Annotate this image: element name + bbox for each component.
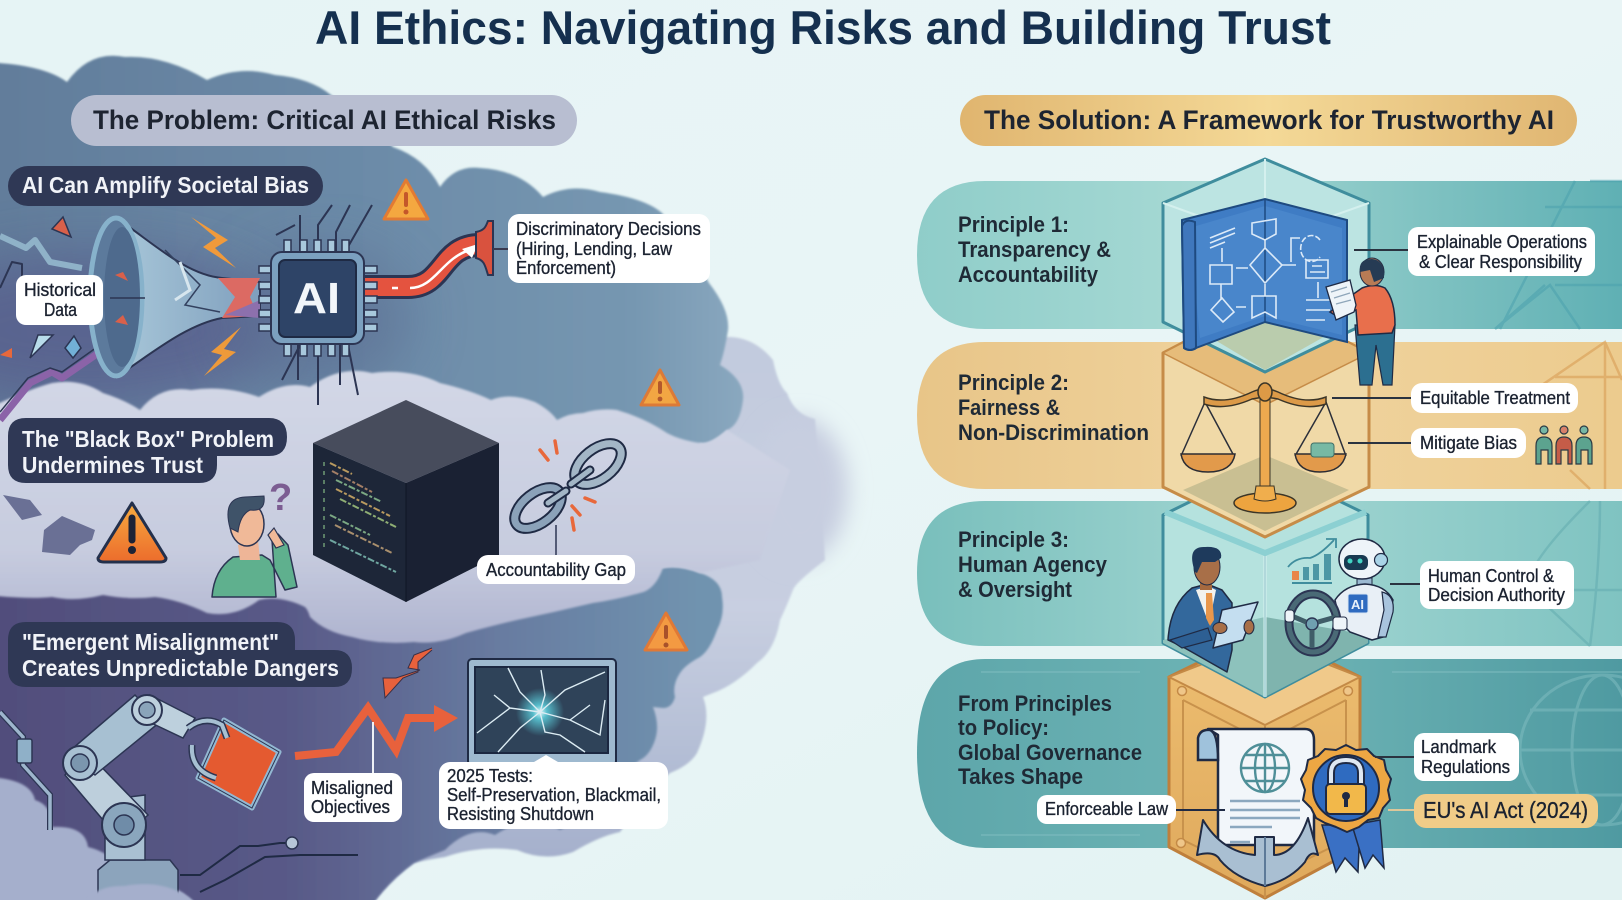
callout: EU AI act xyxy=(1388,794,1598,828)
band 2 xyxy=(917,342,1622,489)
upper blue cloud xyxy=(0,56,743,600)
text: principle 3: Principle 3: xyxy=(958,527,1069,552)
callout: equitable treatment: Equitable Treatment xyxy=(1420,388,1570,408)
icon: torn fragments and warning xyxy=(3,495,166,562)
heading: the problem xyxy=(71,95,577,146)
icon: robot arm gripping chip xyxy=(0,695,358,900)
base xyxy=(98,860,178,900)
callout: human control: Decision Authority xyxy=(1428,585,1565,605)
code lines xyxy=(330,463,396,572)
subheading: emergent misalignment: Creates Unpredictable Dangers xyxy=(22,655,339,681)
gripper xyxy=(188,721,227,778)
icon: black box cube xyxy=(313,400,499,602)
outer lavender cloud mass xyxy=(0,337,825,900)
callout: landmark regulations xyxy=(1375,733,1519,781)
band background motifs xyxy=(1495,181,1622,329)
callout: 2025 tests xyxy=(439,755,668,829)
callout: discriminatory decisions: Enforcement) xyxy=(516,258,616,278)
lines and callouts for principle 2 xyxy=(1332,383,1578,458)
subheading: black box xyxy=(8,418,287,483)
text: principle 1: Principle 1: xyxy=(958,212,1069,237)
text: from principles to policy: to Policy: xyxy=(958,715,1049,740)
subheading: black box: Undermines Trust xyxy=(22,452,203,478)
callout: misaligned objectives: Objectives xyxy=(311,797,390,817)
middle lavender cloud xyxy=(0,371,790,643)
circuit traces xyxy=(180,843,358,892)
icon: confused man: ? xyxy=(269,477,292,519)
panel: principle bands xyxy=(917,181,1622,848)
icon: person reading document xyxy=(1326,258,1395,385)
bottom left lavender cloud xyxy=(0,777,197,900)
title: AI Ethics: Navigating Risks and Building Trust xyxy=(315,1,1331,54)
icon: warning triangle 1 xyxy=(384,180,428,219)
icon: three people xyxy=(1536,426,1592,464)
callout: explainable operations xyxy=(1354,227,1595,276)
cloud wisp over robot base xyxy=(85,884,197,900)
icon: seal badge with lock xyxy=(1301,745,1391,872)
lower purple-blue cloud xyxy=(0,560,723,900)
band 3 xyxy=(917,501,1622,646)
icon: scales of justice xyxy=(1181,383,1346,513)
callout: mitigate bias xyxy=(1411,428,1526,458)
callout: human control: Human Control & xyxy=(1428,566,1554,586)
subheading: black box: The "Black Box" Problem xyxy=(22,426,274,452)
cracks and debris xyxy=(0,236,110,420)
callout: misaligned objectives xyxy=(304,773,402,822)
lower arm xyxy=(65,750,148,840)
icon: anchor xyxy=(1197,818,1318,886)
band 4 xyxy=(917,659,1622,848)
callout: explainable operations: Explainable Operations xyxy=(1417,232,1587,252)
soft right edge of lavender mass xyxy=(752,418,848,562)
callout: enforceable law xyxy=(1037,795,1225,824)
text: principle 1: Accountability xyxy=(958,262,1099,287)
callout: human control xyxy=(1390,561,1574,609)
callout: historical data: Data xyxy=(44,300,78,320)
callout: historical data xyxy=(16,275,103,325)
callout: accountability gap: Accountability Gap xyxy=(486,560,626,580)
red output pipe xyxy=(360,221,508,288)
icon: AI chip xyxy=(259,205,377,405)
text: from principles to policy: Takes Shape xyxy=(958,764,1083,789)
heading: the solution xyxy=(960,95,1577,146)
icon: steering wheel xyxy=(1285,594,1347,652)
callout: accountability gap xyxy=(477,555,635,584)
text: principle 3: & Oversight xyxy=(958,577,1073,602)
icon: cracked monitor xyxy=(468,659,616,765)
panel: problem storm clouds xyxy=(0,56,848,900)
block 1: glass transparency box xyxy=(1163,159,1369,372)
dark purple shade upper left xyxy=(0,255,280,405)
icon: businessman with tablet xyxy=(1168,547,1258,672)
upper arm xyxy=(65,695,160,775)
block 2: wooden fairness box xyxy=(1163,300,1369,537)
callout: discriminatory decisions: (Hiring, Lending, Law xyxy=(516,239,673,259)
icon: law scroll xyxy=(1198,729,1314,845)
callout: historical data: Historical xyxy=(24,280,96,300)
text: from principles to policy: From Principles xyxy=(958,691,1112,716)
callout: landmark regulations: Landmark xyxy=(1421,737,1497,757)
subheading: bias xyxy=(8,166,323,206)
text: from principles to policy: Global Governance xyxy=(958,740,1142,765)
callout: landmark regulations: Regulations xyxy=(1421,757,1510,777)
block 4: wooden policy crate xyxy=(1169,630,1360,898)
illustration: data funnel xyxy=(0,217,260,420)
text: from principles to policy xyxy=(958,691,1142,789)
funnel xyxy=(116,218,260,377)
text: principle 3 xyxy=(958,527,1108,602)
pipes xyxy=(0,712,50,830)
callout: discriminatory decisions xyxy=(508,214,710,283)
callout: enforceable law: Enforceable Law xyxy=(1045,799,1169,819)
callout: explainable operations: & Clear Responsibility xyxy=(1419,252,1582,272)
icon: small bar chart xyxy=(1288,539,1336,583)
callout: 2025 tests: 2025 Tests: xyxy=(447,766,533,786)
text: principle 2: Fairness & xyxy=(958,395,1060,420)
joints xyxy=(102,803,146,847)
icon: warning triangle 2 xyxy=(641,370,679,405)
icon: lightning bolts xyxy=(191,217,241,376)
callout: mitigate bias: Mitigate Bias xyxy=(1420,433,1517,453)
icon: blue blueprint xyxy=(1182,199,1347,350)
text: principle 2: Principle 2: xyxy=(958,370,1069,395)
icon: confused man xyxy=(212,477,297,597)
heading: the problem: The Problem: Critical AI Ethical Risks xyxy=(93,105,556,135)
callout: discriminatory decisions: Discriminatory Decisions xyxy=(516,219,701,239)
icon: broken chain xyxy=(507,436,629,555)
text: principle 1: Transparency & xyxy=(958,237,1111,262)
subheading: emergent misalignment xyxy=(8,622,352,687)
text: principle 1 xyxy=(958,212,1111,287)
callout: equitable treatment xyxy=(1411,383,1578,413)
icon: AI chip: AI xyxy=(293,274,340,323)
icon: warning triangle 3 xyxy=(645,613,687,650)
chip xyxy=(198,720,279,808)
callout: 2025 tests: Resisting Shutdown xyxy=(447,804,594,824)
subheading: emergent misalignment: "Emergent Misalignment" xyxy=(22,629,279,655)
heading: the solution: The Solution: A Framework for Trustworthy AI xyxy=(984,105,1554,135)
icon: robot at the wheel: AI xyxy=(1351,597,1364,612)
callout: 2025 tests: Self-Preservation, Blackmail, xyxy=(447,785,661,805)
icon: zigzag misalignment arrow xyxy=(295,648,458,773)
text: principle 2: Non-Discrimination xyxy=(958,420,1149,445)
icon: robot at the wheel xyxy=(1335,539,1393,640)
subheading: bias: AI Can Amplify Societal Bias xyxy=(22,172,309,198)
text: principle 3: Human Agency xyxy=(958,552,1108,577)
callout: EU AI act: EU's AI Act (2024) xyxy=(1423,797,1588,823)
band 1 xyxy=(917,181,1622,329)
text: principle 2 xyxy=(958,370,1149,445)
callout: misaligned objectives: Misaligned xyxy=(311,778,393,798)
block 3: glass human agency box xyxy=(1163,465,1368,697)
